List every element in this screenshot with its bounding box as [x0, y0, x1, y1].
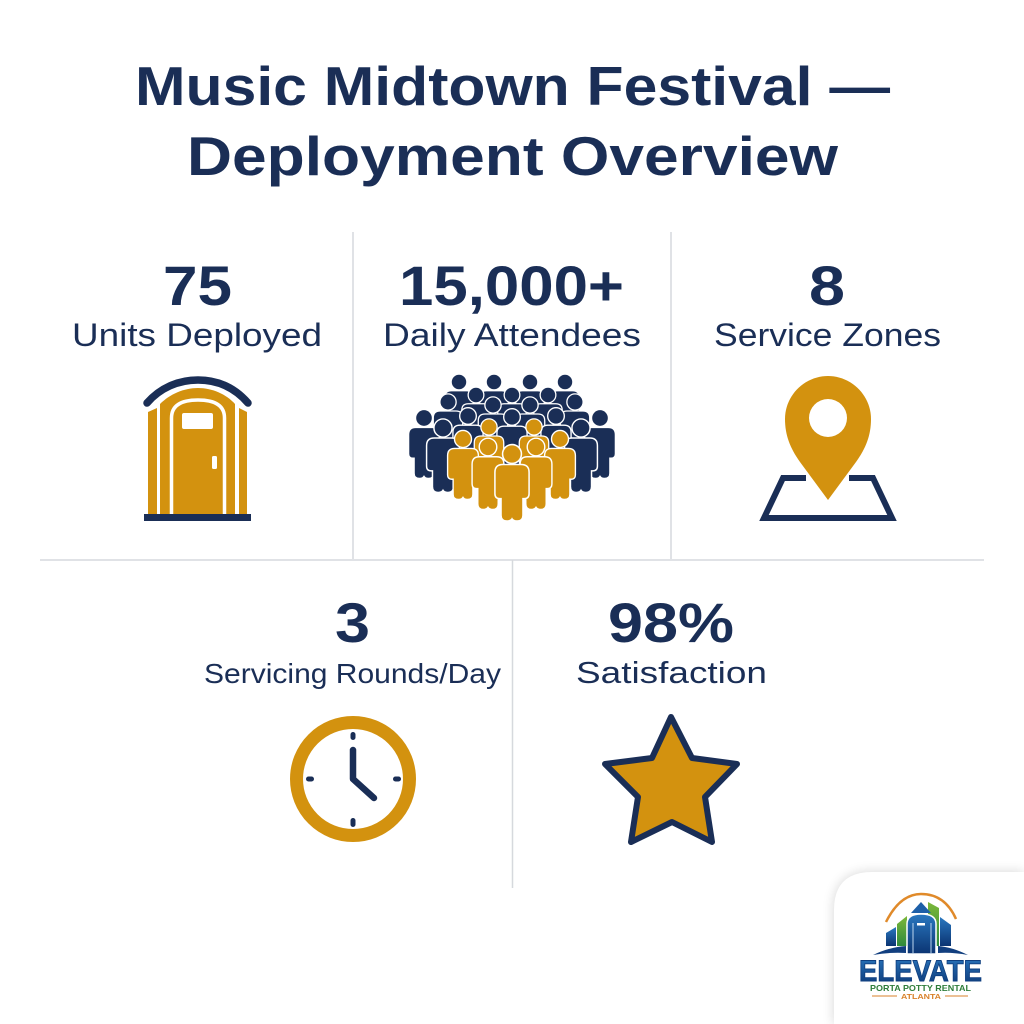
stat: 3: 3: [335, 591, 370, 654]
logo: ground swoosh: [873, 946, 968, 955]
title: Music Midtown Festival —: [135, 55, 890, 117]
panel: satisfaction: [576, 591, 767, 842]
stat: 98%: 98%: [608, 591, 734, 654]
stat: 15,000+: 15,000+: [399, 254, 624, 317]
panel: servicing rounds: [204, 591, 501, 836]
panel: units deployed: [72, 254, 322, 521]
label: servicing rounds per day: Servicing Rounds/Day: [204, 658, 501, 689]
logo: location: ATLANTA: [901, 992, 942, 1001]
logo: tagline: PORTA POTTY RENTAL: [870, 983, 971, 993]
stat: 75: 75: [163, 254, 232, 317]
logo: arc: [886, 894, 956, 922]
stat: 8: 8: [809, 254, 845, 317]
icon: clock: [296, 722, 410, 836]
logo: location: [872, 992, 968, 1001]
label: units deployed: Units Deployed: [72, 317, 322, 353]
label: daily attendees: Daily Attendees: [383, 317, 641, 353]
icon: crowd of people: [409, 375, 615, 520]
title: [135, 55, 890, 187]
logo card: [834, 872, 1024, 1024]
label: service zones: Service Zones: [714, 317, 941, 353]
panel: service zones: [714, 254, 941, 518]
label: satisfaction: Satisfaction: [576, 655, 767, 690]
logo: buildings: [886, 902, 951, 946]
icon: portable toilet: [144, 380, 251, 521]
logo: portable toilet: [907, 914, 936, 954]
logo: wordmark: ELEVATE: [859, 955, 982, 988]
icon: map pin: [764, 376, 892, 518]
icon: star: [605, 717, 737, 842]
panel: daily attendees: [383, 254, 641, 520]
title: Deployment Overview: [187, 125, 838, 187]
